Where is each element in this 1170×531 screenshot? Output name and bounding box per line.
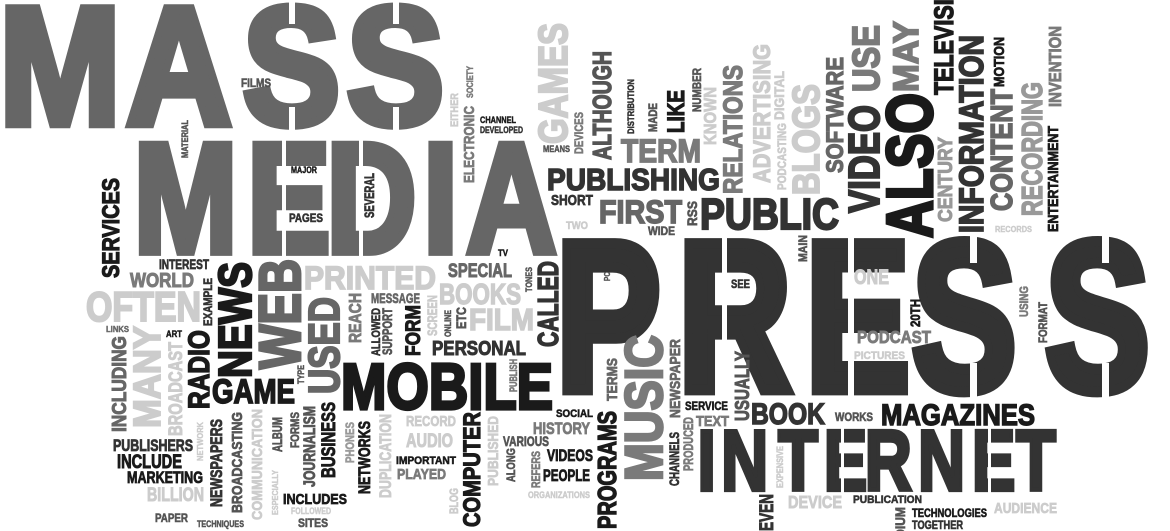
- word: CHANNELS: CHANNELS: [667, 432, 682, 486]
- word: OFTEN: OFTEN: [86, 283, 201, 330]
- word: PUBLISHED: PUBLISHED: [486, 416, 502, 486]
- word: MEANS: MEANS: [543, 144, 570, 155]
- word: BILLION: BILLION: [147, 485, 204, 506]
- word: MOTION: MOTION: [992, 37, 1008, 87]
- word: PUBLISHING: PUBLISHING: [547, 162, 720, 197]
- word: COMPUTER: COMPUTER: [459, 412, 486, 527]
- word: BLOGS: BLOGS: [786, 84, 828, 195]
- word: TECHNOLOGIES: TECHNOLOGIES: [912, 506, 987, 520]
- word: RECORDS: RECORDS: [995, 225, 1033, 234]
- word: MUSIC: MUSIC: [615, 335, 674, 481]
- word: PC: PC: [603, 272, 612, 281]
- word: INTERNET: INTERNET: [698, 413, 1056, 509]
- word: SOCIAL: SOCIAL: [556, 408, 593, 420]
- word: RSS: RSS: [685, 201, 700, 226]
- word: TV: TV: [498, 248, 509, 259]
- word: EVEN: EVEN: [757, 494, 778, 531]
- word: PICTURES: PICTURES: [854, 350, 905, 362]
- word: MAGAZINES: MAGAZINES: [881, 399, 1035, 432]
- word: PUBLISH: PUBLISH: [508, 359, 520, 392]
- word: TEXT: TEXT: [696, 414, 729, 430]
- word: RADIO: RADIO: [183, 330, 216, 409]
- word: EXAMPLE: EXAMPLE: [201, 278, 215, 326]
- word: PRESS: PRESS: [556, 197, 1150, 435]
- word: ART: ART: [166, 329, 182, 340]
- word: ALLOWED: ALLOWED: [369, 308, 383, 356]
- word: CHANNEL: CHANNEL: [480, 115, 516, 126]
- word: DISTRIBUTION: DISTRIBUTION: [626, 79, 637, 134]
- word: ALONG: ALONG: [504, 448, 518, 482]
- word: TYPE: TYPE: [296, 365, 307, 384]
- word: ALSO: ALSO: [873, 93, 946, 238]
- word: AUDIO: AUDIO: [406, 431, 453, 452]
- word: USED: USED: [301, 297, 349, 394]
- word: EXPENSIVE: EXPENSIVE: [775, 446, 786, 488]
- word: EITHER: EITHER: [449, 93, 461, 127]
- word: INCLUDE: INCLUDE: [117, 452, 182, 473]
- word: PLAYED: PLAYED: [397, 467, 446, 483]
- word: CENTURY: CENTURY: [935, 137, 957, 222]
- word: TWO: TWO: [566, 220, 588, 232]
- word: WIDE: WIDE: [648, 224, 675, 238]
- word: MAJOR: MAJOR: [291, 165, 317, 176]
- word: USUALLY: USUALLY: [732, 351, 754, 421]
- word: ONLINE: ONLINE: [443, 310, 454, 337]
- word: NETWORK: NETWORK: [196, 422, 205, 461]
- word: NUMBER: NUMBER: [690, 68, 704, 112]
- word: SEE: SEE: [731, 277, 750, 291]
- word: MARKETING: MARKETING: [127, 469, 203, 487]
- word: HISTORY: HISTORY: [533, 420, 590, 438]
- word: SITES: SITES: [298, 516, 328, 530]
- word: BROADCASTING: BROADCASTING: [230, 412, 246, 513]
- word: FORMS: FORMS: [288, 412, 302, 448]
- word: INVENTION: INVENTION: [1045, 26, 1065, 107]
- word: ETC: ETC: [454, 307, 469, 329]
- word: MEDIA: MEDIA: [134, 111, 557, 285]
- word: WEB: WEB: [248, 259, 313, 369]
- word: MADE: MADE: [646, 103, 660, 132]
- word: FORM: FORM: [400, 305, 425, 356]
- word: RECORD: RECORD: [406, 414, 456, 430]
- word: DUPLICATION: DUPLICATION: [377, 414, 395, 498]
- word: RECORDING: RECORDING: [1017, 82, 1049, 216]
- word: TERM: TERM: [621, 133, 701, 169]
- word: PAGES: PAGES: [289, 211, 323, 225]
- word: BUSINESS: BUSINESS: [319, 402, 340, 478]
- word: SERVICES: SERVICES: [98, 178, 125, 278]
- word: SOCIETY: SOCIETY: [465, 65, 476, 98]
- word: ENTERTAINMENT: ENTERTAINMENT: [1046, 126, 1062, 232]
- word: SPECIAL: SPECIAL: [448, 261, 512, 282]
- word: DEVELOPED: DEVELOPED: [480, 125, 523, 136]
- word: MOBILE: MOBILE: [341, 350, 553, 423]
- word: LIKE: LIKE: [663, 90, 690, 133]
- word: PUBLIC: PUBLIC: [700, 191, 839, 239]
- word: NEWSPAPER: NEWSPAPER: [668, 339, 684, 418]
- word: KNOWN: KNOWN: [700, 87, 720, 145]
- word: PODCAST: PODCAST: [857, 327, 931, 347]
- word: BLOG: BLOG: [447, 488, 461, 514]
- word: FILMS: FILMS: [241, 76, 271, 90]
- word: PUBLICATION: PUBLICATION: [853, 494, 922, 506]
- word: BOOKS: BOOKS: [439, 279, 521, 311]
- word: ALTHOUGH: ALTHOUGH: [589, 51, 617, 160]
- word: LINKS: LINKS: [106, 325, 130, 334]
- word: JOURNALISM: JOURNALISM: [301, 406, 319, 487]
- word: FOLLOWED: FOLLOWED: [291, 506, 331, 517]
- word: PHONES: PHONES: [343, 422, 357, 463]
- word: VARIOUS: VARIOUS: [503, 434, 549, 449]
- word: MAY: MAY: [887, 21, 926, 92]
- word: ADVERTISING: ADVERTISING: [749, 44, 776, 183]
- word: 20TH: 20TH: [908, 299, 923, 327]
- word: SOFTWARE: SOFTWARE: [822, 57, 849, 173]
- word: PUBLISHERS: PUBLISHERS: [113, 437, 193, 455]
- word: WORKS: WORKS: [835, 410, 873, 424]
- word: PEOPLE: PEOPLE: [543, 467, 590, 485]
- word: NEWSPAPERS: NEWSPAPERS: [208, 419, 226, 507]
- word: PROGRAMS: PROGRAMS: [594, 411, 622, 529]
- word: WORLD: WORLD: [130, 270, 194, 292]
- word: MAIN: MAIN: [796, 235, 810, 262]
- word: REACH: REACH: [345, 293, 365, 343]
- word: BROADCAST: BROADCAST: [166, 342, 187, 436]
- word: BOOK: BOOK: [751, 398, 825, 431]
- word: PRODUCED: PRODUCED: [681, 417, 696, 471]
- word: SEVERAL: SEVERAL: [362, 173, 377, 218]
- word: MATERIAL: MATERIAL: [180, 120, 191, 158]
- word: DEVICE: DEVICE: [788, 492, 842, 512]
- word: NEWS: NEWS: [209, 262, 261, 378]
- word: DEVICES: DEVICES: [572, 112, 586, 154]
- word: ESPECIALLY: ESPECIALLY: [271, 469, 280, 515]
- word: SERVICE: SERVICE: [685, 399, 728, 413]
- word: INFORMATION: INFORMATION: [953, 35, 991, 233]
- word: MANY: MANY: [127, 326, 169, 428]
- word: SHORT: SHORT: [551, 193, 593, 209]
- word: SCREEN: SCREEN: [425, 295, 440, 336]
- word: ORGANIZATIONS: ORGANIZATIONS: [528, 490, 590, 501]
- word: GAME: GAME: [212, 373, 295, 411]
- word: PRINTED: PRINTED: [304, 260, 436, 296]
- word: MESSAGE: MESSAGE: [371, 291, 420, 306]
- word: ONE: ONE: [854, 264, 889, 289]
- word: CALLED: CALLED: [533, 261, 565, 347]
- word: FIRST: FIRST: [599, 194, 682, 230]
- word: INCLUDES: INCLUDES: [283, 492, 347, 508]
- word: AUDIENCE: AUDIENCE: [994, 501, 1057, 517]
- word: TERMS: TERMS: [605, 358, 621, 401]
- word: DIGITAL: DIGITAL: [772, 71, 787, 120]
- word: TECHNIQUES: TECHNIQUES: [197, 519, 244, 530]
- word: VIDEO: VIDEO: [841, 105, 889, 213]
- word: NETWORKS: NETWORKS: [356, 421, 374, 494]
- word: PERSONAL: PERSONAL: [432, 338, 526, 360]
- word: TONES: TONES: [524, 267, 535, 292]
- word: IMPORTANT: IMPORTANT: [396, 455, 456, 467]
- word: INTEREST: INTEREST: [159, 257, 210, 272]
- word: PODCASTING: PODCASTING: [775, 123, 789, 190]
- word: PAPER: PAPER: [155, 511, 188, 525]
- word: FILM: FILM: [469, 302, 534, 337]
- word: ELECTRONIC: ELECTRONIC: [462, 106, 478, 183]
- word: SUPPORT: SUPPORT: [380, 307, 395, 355]
- word: INCLUDING: INCLUDING: [109, 336, 131, 432]
- word: FORMAT: FORMAT: [1036, 302, 1050, 343]
- word: REFERS: REFERS: [529, 451, 543, 488]
- word: USE: USE: [846, 25, 888, 92]
- word: CONTENT: CONTENT: [984, 89, 1019, 211]
- word: COMMUNICATION: COMMUNICATION: [250, 409, 266, 520]
- word: VIDEOS: VIDEOS: [547, 447, 593, 465]
- word: RELATIONS: RELATIONS: [718, 65, 748, 194]
- word: USING: USING: [1017, 286, 1031, 317]
- word: ALBUM: ALBUM: [270, 417, 285, 452]
